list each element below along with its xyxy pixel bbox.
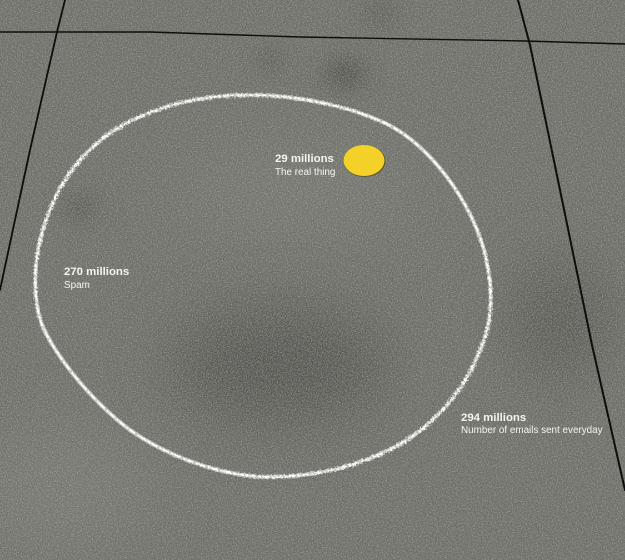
label: 29 millions	[275, 153, 335, 178]
chalk circle: total emails	[35, 95, 491, 477]
label: 294 millions: Number of emails sent everyday	[461, 425, 603, 436]
label: 270 millions	[64, 266, 129, 291]
label: 294 millions	[461, 412, 603, 436]
yellow dot: the real thing	[344, 145, 386, 177]
label: 270 millions: Spam	[64, 280, 90, 291]
label: 294 millions: 294 millions	[461, 412, 526, 424]
label: 270 millions: 270 millions	[64, 266, 129, 278]
label: 29 millions: The real thing	[275, 167, 335, 178]
label: 29 millions: 29 millions	[275, 153, 334, 165]
